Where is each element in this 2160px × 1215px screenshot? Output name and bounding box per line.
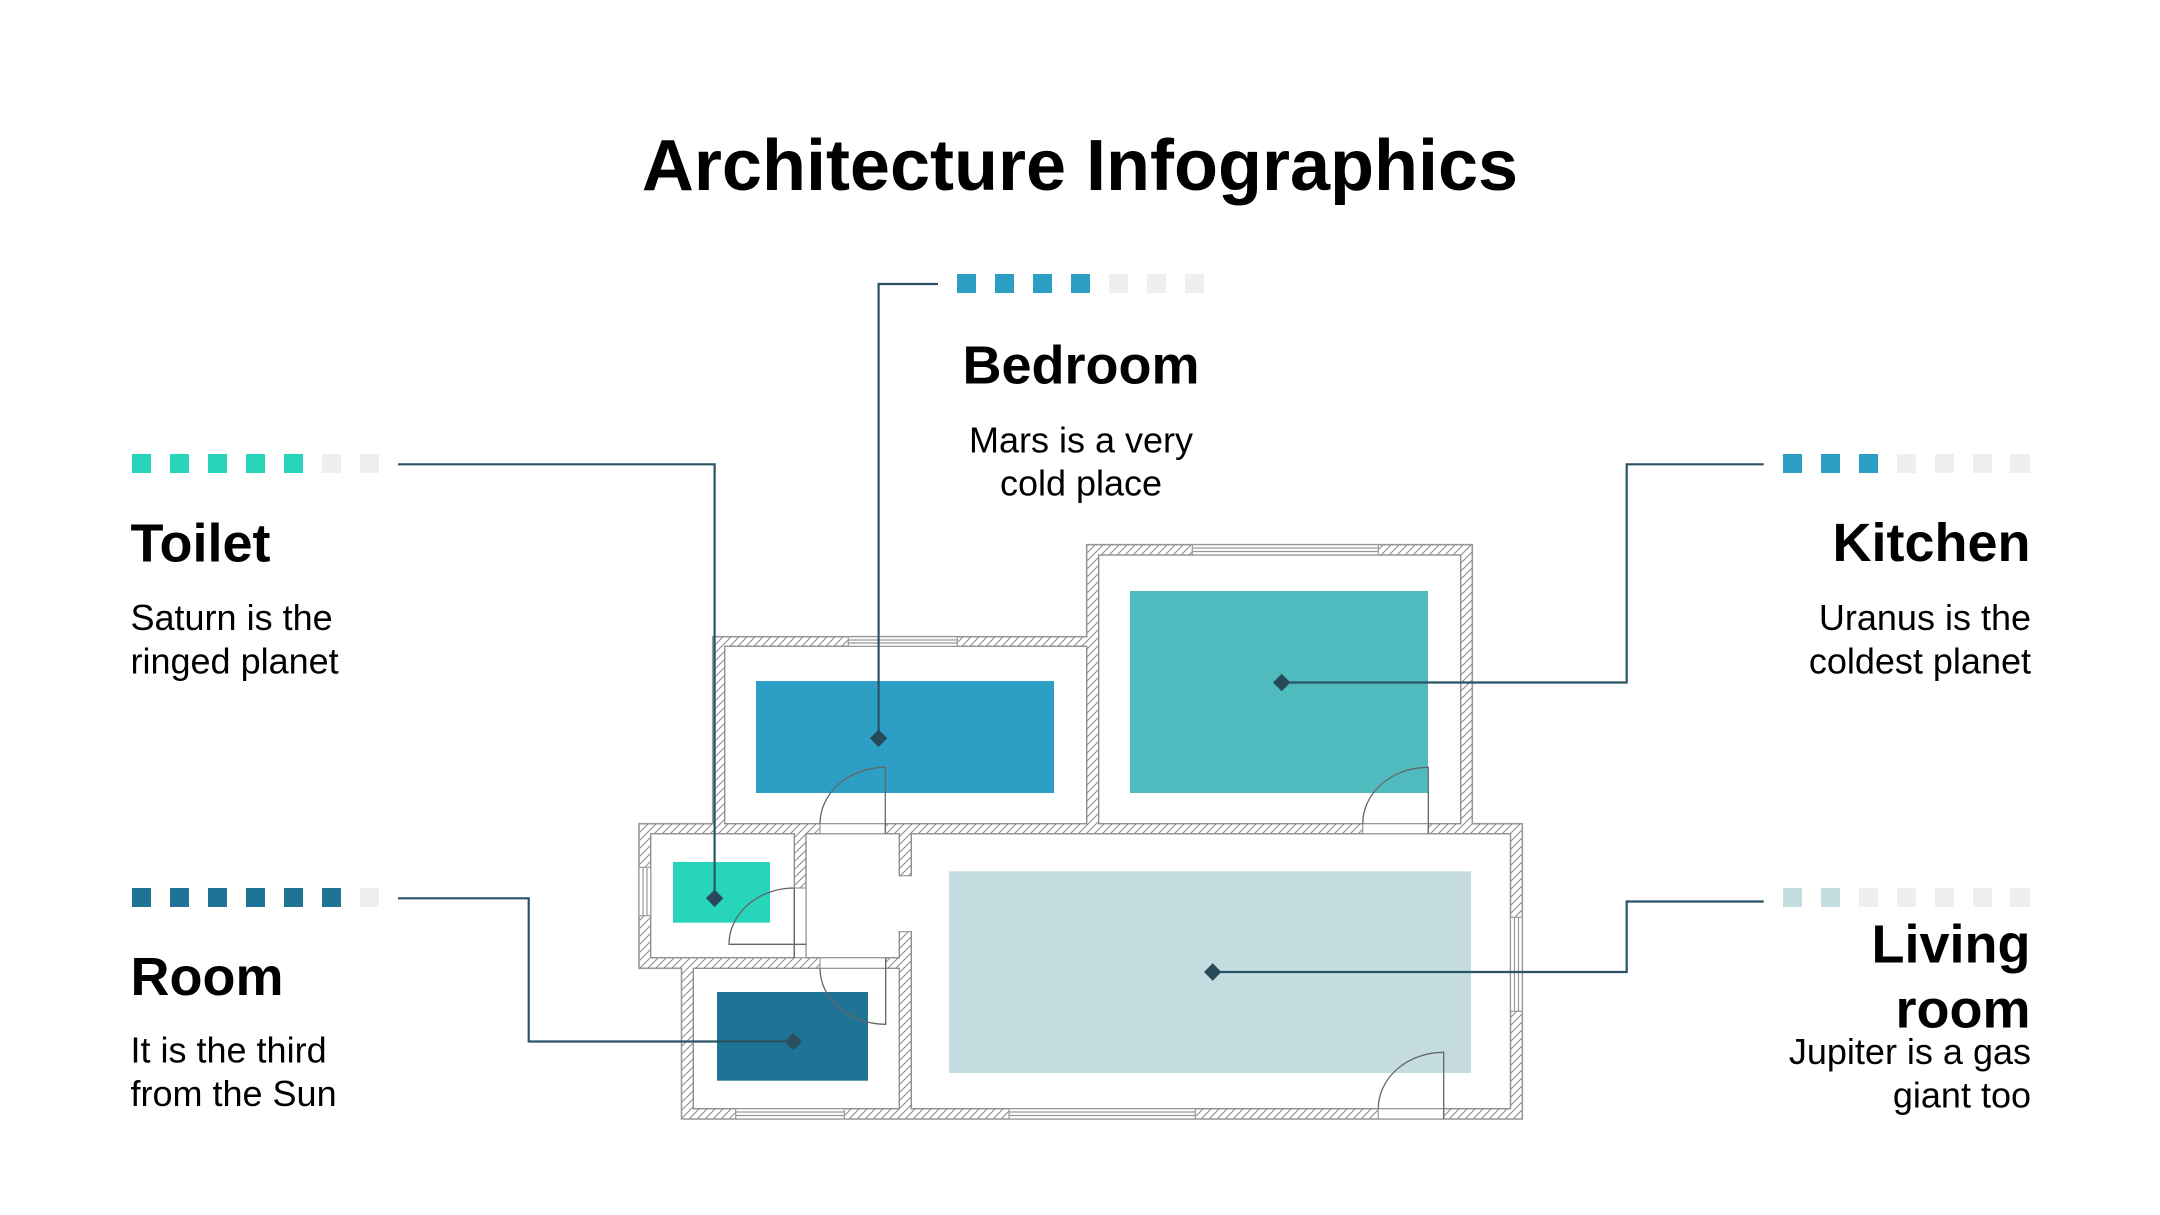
heading: bedroom: Bedroom [962, 335, 1200, 395]
text: living room: Jupiter is a gas [1789, 1031, 2031, 1072]
heading: kitchen: Kitchen [1832, 513, 2030, 573]
rating squares: room [132, 888, 379, 907]
text: kitchen: coldest planet [1809, 640, 2031, 681]
text: bedroom: cold place [1000, 462, 1162, 504]
room fill: room [717, 992, 868, 1081]
doors [729, 767, 1444, 1119]
text: room: from the Sun [130, 1073, 337, 1114]
room fill: living room [949, 871, 1471, 1073]
panel: toilet [130, 454, 379, 681]
rating squares: living room [1783, 888, 2030, 907]
connector: living room [1204, 902, 1764, 981]
rating squares: bedroom [957, 274, 1204, 293]
room fill: toilet [673, 862, 770, 923]
panel: room [130, 888, 379, 1114]
connector: toilet [398, 464, 723, 907]
title: Architecture Infographics [642, 126, 1518, 206]
hallway opening [898, 876, 913, 932]
room fill: kitchen [1130, 591, 1428, 793]
rating squares: toilet [132, 454, 379, 473]
text: bedroom: Mars is a very [969, 420, 1193, 460]
walls [639, 545, 1522, 1119]
connector: room [398, 898, 802, 1050]
heading: living room: room [1896, 980, 2030, 1040]
panel: kitchen [1783, 454, 2031, 681]
heading: toilet: Toilet [130, 514, 271, 574]
heading: room: Room [130, 947, 283, 1007]
panel: living room [1783, 888, 2031, 1115]
floor plan [639, 545, 1522, 1119]
door openings [794, 824, 1444, 1119]
room fill: bedroom [756, 681, 1054, 793]
text: room: It is the third [130, 1030, 327, 1071]
connector: kitchen [1273, 464, 1764, 691]
text: living room: giant too [1893, 1074, 2031, 1115]
connector: bedroom [870, 284, 938, 747]
windows [639, 545, 1522, 1119]
text: toilet: Saturn is the [130, 597, 333, 638]
text: toilet: ringed planet [130, 640, 339, 681]
rating squares: kitchen [1783, 454, 2030, 473]
text: kitchen: Uranus is the [1819, 597, 2031, 638]
heading: living room: Living [1872, 915, 2030, 975]
room outlines [651, 555, 1510, 1109]
panel: bedroom [957, 274, 1204, 504]
